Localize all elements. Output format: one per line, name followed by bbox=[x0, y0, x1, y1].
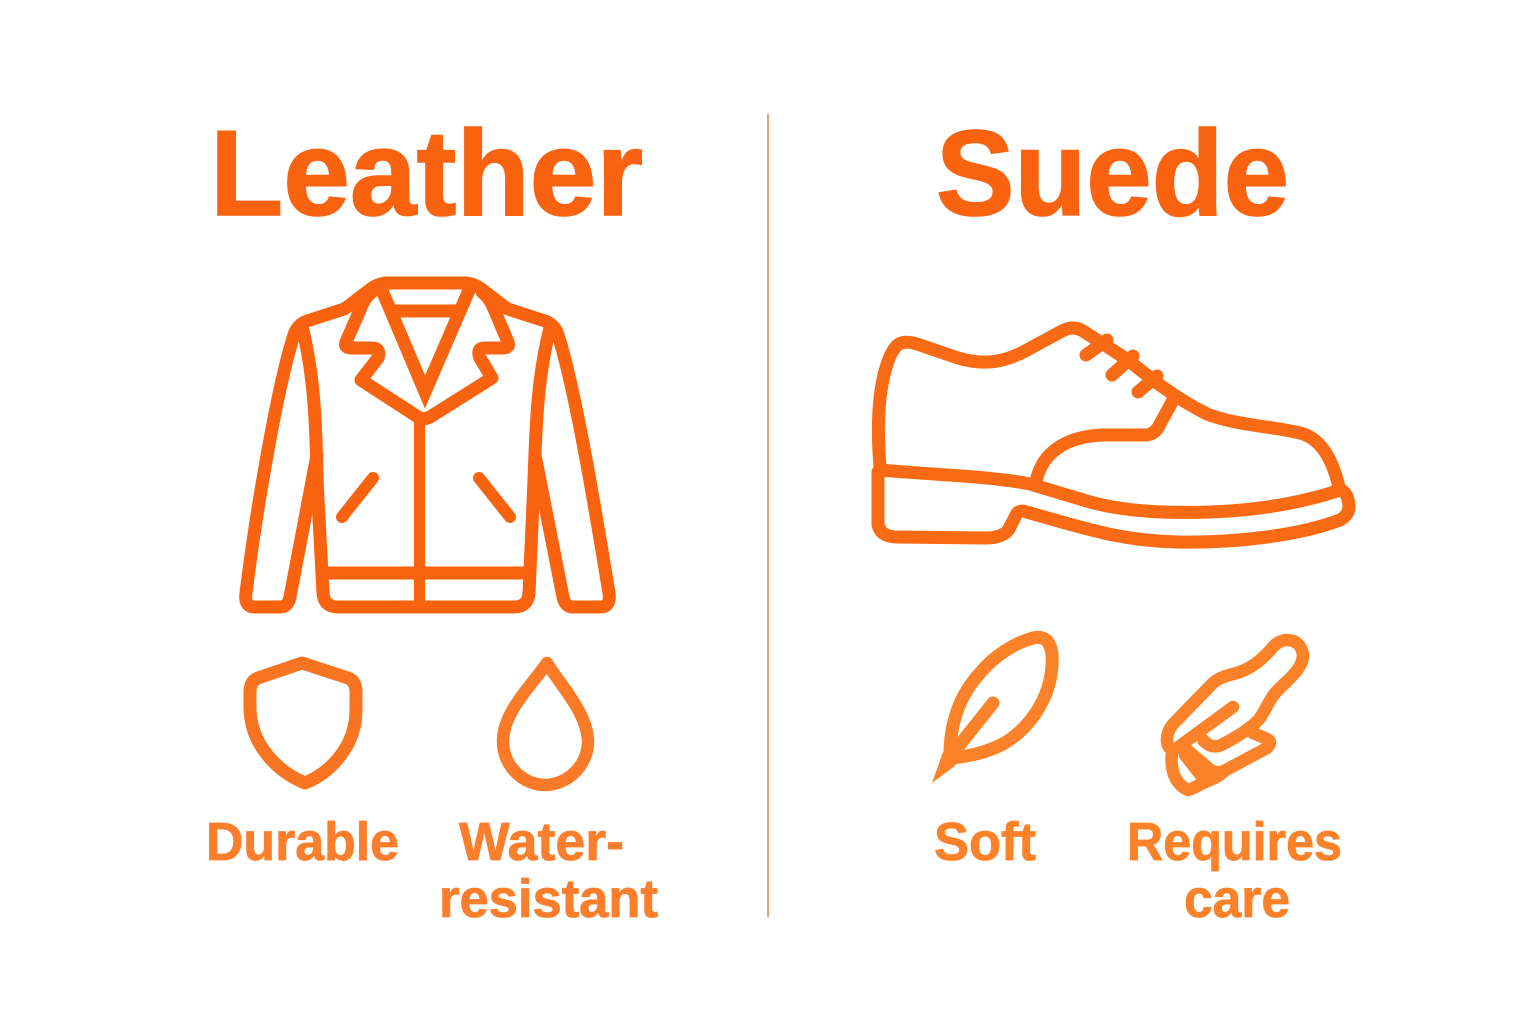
icon: shoe bbox=[878, 328, 1349, 542]
label: Soft: Soft bbox=[934, 812, 1036, 872]
icon: water drop bbox=[503, 663, 588, 785]
heading: Suede: Suede bbox=[936, 105, 1289, 241]
label: Water-resistant: Water- bbox=[459, 812, 624, 872]
icon: feather bbox=[932, 637, 1052, 783]
label: Water-resistant: resistant bbox=[439, 869, 658, 929]
label: Durable: Durable bbox=[206, 812, 399, 872]
icon: leather jacket bbox=[246, 283, 609, 607]
label: Requires care: Requires bbox=[1127, 812, 1342, 872]
icon: suede brush bbox=[1167, 640, 1303, 790]
heading: Leather: Leather bbox=[210, 105, 643, 241]
label: Requires care bbox=[1127, 812, 1342, 929]
icon: shield bbox=[250, 663, 356, 783]
label: Requires care: care bbox=[1184, 869, 1290, 929]
label: Water-resistant bbox=[439, 812, 658, 929]
